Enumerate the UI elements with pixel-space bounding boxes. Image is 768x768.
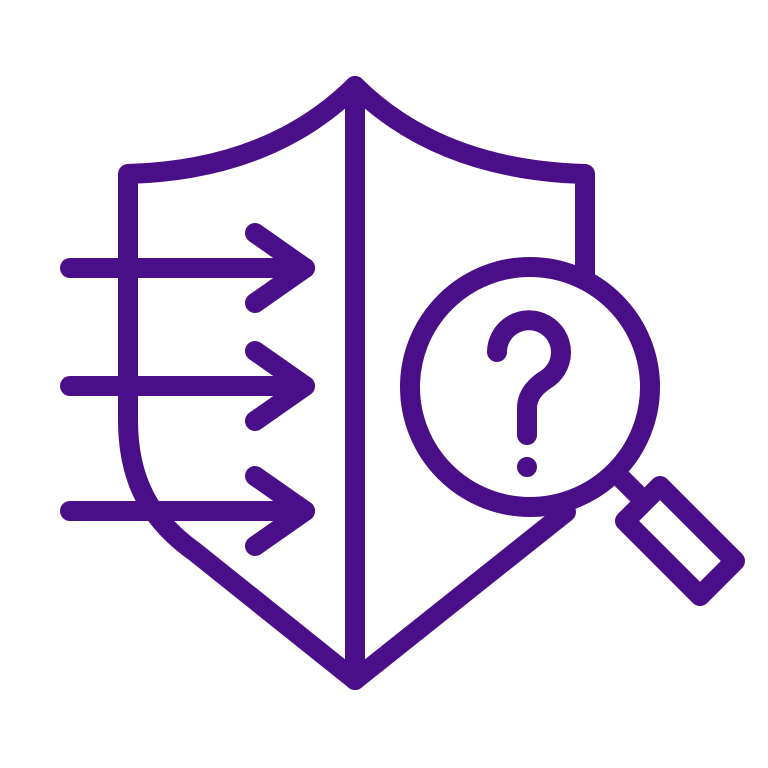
magnifier bbox=[410, 267, 735, 596]
arrow: top bbox=[70, 233, 305, 303]
shield outline bbox=[128, 86, 585, 680]
arrow: bottom bbox=[70, 476, 305, 546]
shield center divider bbox=[345, 86, 365, 680]
question mark bbox=[497, 320, 561, 471]
arrow: middle bbox=[70, 351, 305, 421]
